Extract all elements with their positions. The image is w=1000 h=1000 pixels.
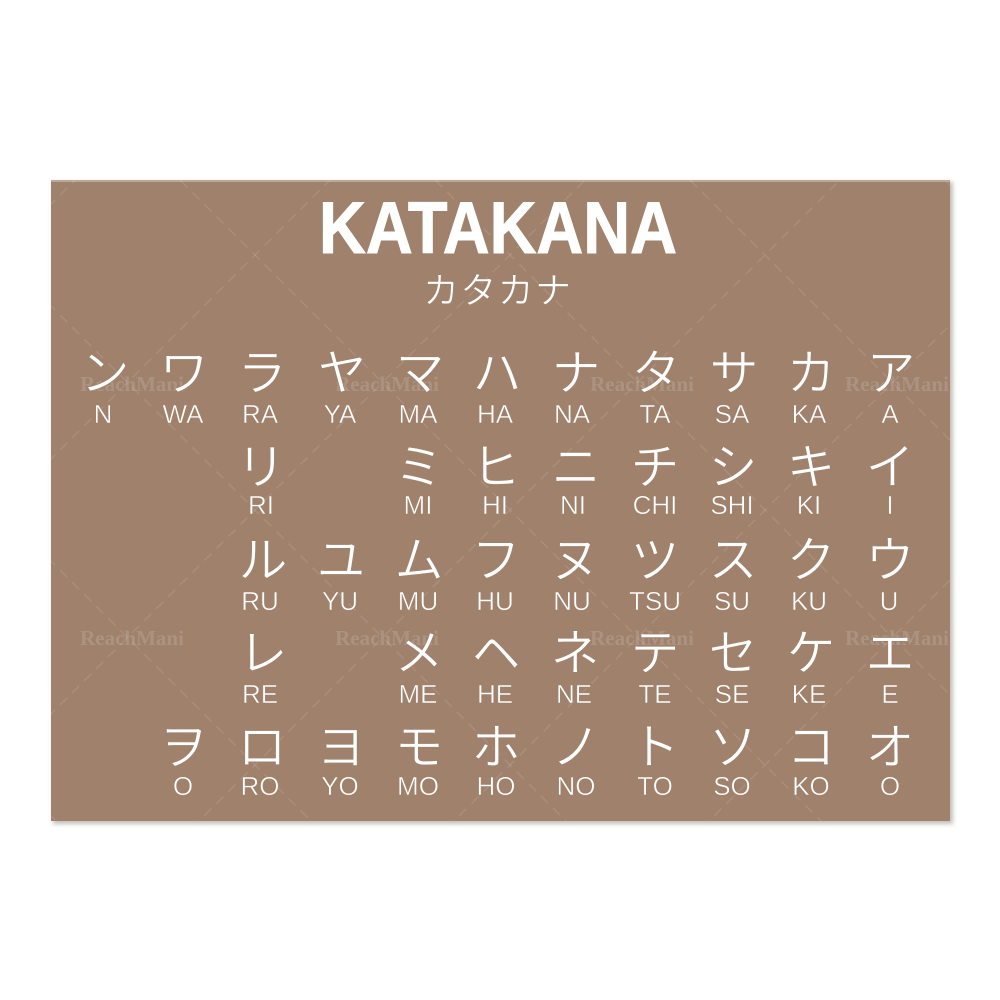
cell: RE: レ	[238, 627, 288, 681]
cell: RA: RA	[242, 399, 279, 429]
cell: SE: セ	[708, 627, 758, 681]
cell: N: N	[94, 399, 112, 429]
cell: HI	[471, 441, 521, 520]
cell: ME	[394, 627, 444, 709]
cell: SE: SE	[715, 679, 749, 709]
cell: MA	[395, 347, 445, 429]
cell: TE	[630, 627, 680, 709]
cell: NE: NE	[556, 679, 592, 709]
cell: WA: WA	[163, 399, 204, 429]
cell: SA	[709, 347, 759, 429]
cell: KU: KU	[791, 586, 827, 616]
cell: YU: ユ	[316, 534, 366, 588]
cell: HO: ホ	[471, 721, 521, 775]
cell: HU: フ	[471, 534, 521, 588]
cell: WO	[158, 721, 208, 801]
cell: RO: RO	[240, 771, 280, 801]
cell: RU	[238, 534, 288, 616]
cell: NE: ネ	[550, 627, 600, 681]
cell: RI	[236, 441, 286, 520]
cell: MO: MO	[397, 771, 439, 801]
cell: MI	[394, 441, 444, 520]
title: KATAKANA	[319, 188, 677, 269]
row: vowel E	[238, 627, 915, 709]
cell: RO: ロ	[237, 721, 287, 775]
row: vowel U	[238, 534, 915, 616]
cell: YO	[316, 721, 366, 801]
cell: SHI: シ	[708, 441, 758, 495]
cell: NA: NA	[554, 399, 591, 429]
cell: E: エ	[865, 627, 915, 681]
cell: CHI: CHI	[633, 490, 677, 520]
cell: KA	[786, 347, 836, 429]
cell: U: U	[880, 586, 898, 616]
cell: E: E	[881, 679, 899, 709]
cell: MU: ム	[394, 534, 444, 588]
cell: I: I	[886, 490, 894, 520]
cell: YO: YO	[321, 771, 359, 801]
cell: TO: TO	[637, 771, 673, 801]
cell: NI: ニ	[551, 441, 601, 495]
cell: CHI	[630, 441, 680, 520]
cell: HA: ハ	[472, 347, 522, 401]
cell: YU	[316, 534, 366, 616]
cell: KO: コ	[786, 721, 836, 775]
cell: KA: カ	[786, 347, 836, 401]
panel: brown background	[51, 180, 950, 821]
cell: KE	[786, 627, 836, 709]
cell: SO	[708, 721, 758, 801]
cell: YA: YA	[324, 399, 357, 429]
cell: HA	[472, 347, 522, 429]
cell: TA	[631, 347, 681, 429]
cell: WA: ワ	[159, 347, 209, 401]
row: vowel O	[158, 721, 915, 801]
cell: O: オ	[865, 721, 915, 775]
cell: MI: MI	[404, 490, 432, 520]
cell: SU: ス	[708, 534, 758, 588]
cell: SU	[708, 534, 758, 616]
cell: YO: ヨ	[316, 721, 366, 775]
cell: RI: RI	[248, 490, 274, 520]
cell: NA: ナ	[551, 347, 601, 401]
cell: HE: ヘ	[471, 627, 521, 681]
watermarks: ReachMani	[845, 372, 949, 396]
cell: HU: HU	[476, 586, 514, 616]
cell: MU: MU	[398, 586, 438, 616]
cell: A: A	[881, 399, 899, 429]
cell: HA: HA	[477, 399, 514, 429]
cell: TO	[630, 721, 680, 801]
cell: I	[865, 441, 915, 520]
cell: WO: ヲ	[158, 721, 208, 775]
watermarks: ReachMani	[335, 372, 439, 396]
cell: WA	[159, 347, 209, 429]
subtitle: カタカナ	[423, 270, 571, 311]
cell: RA	[237, 347, 287, 429]
cell: MI: ミ	[394, 441, 444, 495]
cell: SU: SU	[714, 586, 750, 616]
cell: NO	[551, 721, 601, 801]
cell: HE	[471, 627, 521, 709]
cell: NO: NO	[556, 771, 596, 801]
cell: MO	[394, 721, 444, 801]
cell: KE: KE	[792, 679, 826, 709]
cell: KU: ク	[786, 534, 836, 588]
cell: KA: KA	[792, 399, 827, 429]
poster	[50, 180, 956, 826]
cell: NE	[550, 627, 600, 709]
cell: A: ア	[866, 347, 916, 401]
cell: NU	[550, 534, 600, 616]
cell: TSU: TSU	[629, 586, 681, 616]
cell: N	[80, 347, 130, 429]
cell: E	[865, 627, 915, 709]
row: vowel A	[80, 347, 916, 429]
cell: YA: ヤ	[317, 347, 367, 401]
cell: SA: SA	[715, 399, 750, 429]
cell: SE	[708, 627, 758, 709]
watermarks: ReachMani	[80, 372, 184, 396]
cell: YU: YU	[322, 586, 358, 616]
cell: TA: タ	[631, 347, 681, 401]
cell: TSU	[629, 534, 681, 616]
cell: CHI: チ	[630, 441, 680, 495]
cell: TA: TA	[639, 399, 671, 429]
cell: N: ン	[80, 347, 130, 401]
cell: RU: RU	[241, 586, 279, 616]
cell: SO: SO	[713, 771, 751, 801]
cell: A	[866, 347, 916, 429]
cell: YA	[317, 347, 367, 429]
cell: ME: メ	[394, 627, 444, 681]
watermarks: ReachMani	[845, 626, 949, 650]
cell: HO	[471, 721, 521, 801]
cell: SO: ソ	[708, 721, 758, 775]
watermarks: ReachMani	[335, 626, 439, 650]
row: vowel I	[236, 441, 915, 520]
cell: RE: RE	[242, 679, 278, 709]
cell: HI: HI	[482, 490, 508, 520]
cell: KI: KI	[797, 490, 821, 520]
cell: RI: リ	[236, 441, 286, 495]
cell: HI: ヒ	[471, 441, 521, 495]
cell: MA: MA	[398, 399, 438, 429]
cell: MO: モ	[394, 721, 444, 775]
cell: O	[865, 721, 915, 801]
cell: SA: サ	[709, 347, 759, 401]
cell: HO: HO	[476, 771, 516, 801]
cell: SHI: SHI	[710, 490, 754, 520]
cell: KE: ケ	[786, 627, 836, 681]
cell: U	[865, 534, 915, 616]
cell: NU: NU	[553, 586, 591, 616]
cell: TE: テ	[630, 627, 680, 681]
cell: RE	[238, 627, 288, 709]
watermarks: ReachMani	[590, 372, 694, 396]
cell: TO: ト	[630, 721, 680, 775]
cell: RO	[237, 721, 287, 801]
cell: ME: ME	[398, 679, 438, 709]
cell: RU: ル	[238, 534, 288, 588]
cell: HE: HE	[477, 679, 513, 709]
watermarks: ReachMani	[80, 626, 184, 650]
cell: NI	[551, 441, 601, 520]
cell: NI: NI	[560, 490, 586, 520]
cell: TE: TE	[638, 679, 672, 709]
cell: KO: KO	[792, 771, 830, 801]
cell: KO	[786, 721, 836, 801]
cell: NU: ヌ	[550, 534, 600, 588]
watermarks: ReachMani	[590, 626, 694, 650]
cell: NO: ノ	[551, 721, 601, 775]
watermarks	[80, 372, 949, 650]
cell: O: O	[880, 771, 900, 801]
cell: HU	[471, 534, 521, 616]
cell: MA: マ	[395, 347, 445, 401]
cell: I: イ	[865, 441, 915, 495]
cell: KI: キ	[786, 441, 836, 495]
cell: SHI	[708, 441, 758, 520]
cell: U: ウ	[865, 534, 915, 588]
cell: MU	[394, 534, 444, 616]
cell: RA: ラ	[237, 347, 287, 401]
cell: TSU: ツ	[630, 534, 680, 588]
cell: WO: O	[173, 771, 193, 801]
cell: NA	[551, 347, 601, 429]
cell: KU	[786, 534, 836, 616]
cell: KI	[786, 441, 836, 520]
